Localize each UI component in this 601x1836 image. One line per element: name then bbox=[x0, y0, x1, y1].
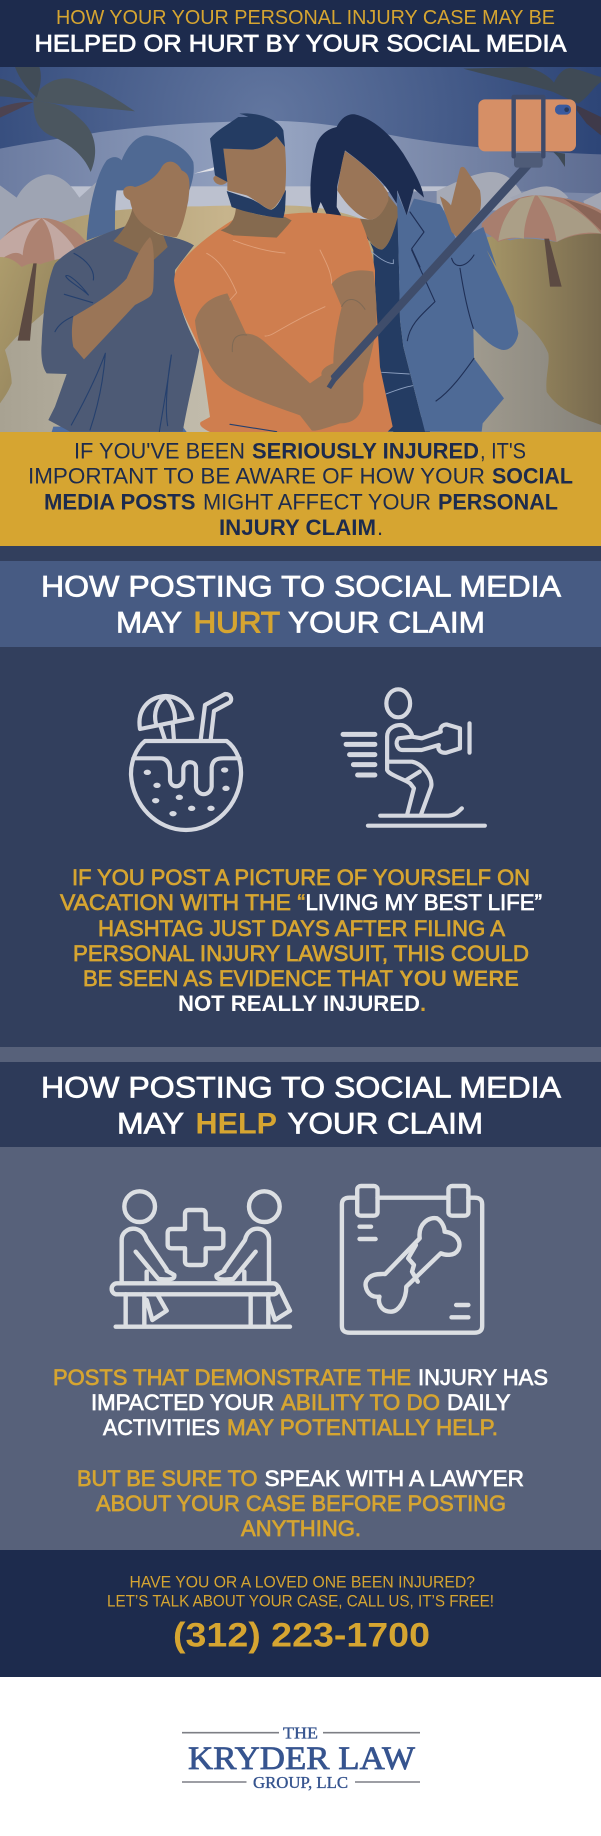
heading: may hurt your claim: MAY bbox=[116, 606, 182, 639]
intro line three bbox=[44, 489, 558, 514]
call to action text: HAVE YOU OR A LOVED ONE BEEN INJURED? bbox=[130, 1573, 475, 1592]
palm tree left bbox=[0, 67, 135, 172]
hurt section text bbox=[60, 865, 542, 1016]
intro line two: IMPORTANT TO BE AWARE OF HOW YOUR bbox=[28, 463, 485, 488]
intro line one: IF YOU'VE BEEN bbox=[74, 438, 245, 463]
sky streak bbox=[194, 167, 215, 174]
phone number: (312) 223-1700 bbox=[173, 1617, 430, 1655]
help section text: IMPACTED YOUR bbox=[91, 1390, 274, 1415]
woman right bbox=[310, 114, 518, 432]
help section text: DAILY bbox=[447, 1390, 511, 1415]
selfie stick bbox=[327, 167, 532, 389]
sand dune right bbox=[480, 233, 601, 425]
help section text: ABOUT YOUR CASE BEFORE POSTING bbox=[96, 1491, 506, 1516]
hurt section text: NOT REALLY INJURED bbox=[178, 991, 420, 1016]
heading: may hurt your claim: YOUR CLAIM bbox=[288, 606, 485, 639]
umbrella pole left bbox=[18, 263, 37, 341]
header line two: HELPED OR HURT BY YOUR SOCIAL MEDIA bbox=[34, 31, 566, 58]
heading: may hurt your claim: HURT bbox=[194, 606, 280, 639]
intro line one: , IT'S bbox=[480, 438, 526, 463]
help section text: MAY POTENTIALLY HELP. bbox=[227, 1415, 498, 1440]
icon: coconut drink with umbrella bbox=[131, 694, 241, 830]
icon: x-ray of fractured bone on clipboard bbox=[342, 1186, 482, 1333]
help section text: BUT BE SURE TO bbox=[77, 1466, 258, 1491]
hurt section text: VACATION WITH THE “ bbox=[60, 890, 305, 915]
beach umbrella left bbox=[0, 218, 87, 267]
help section text bbox=[53, 1365, 548, 1541]
icon: water skier bbox=[343, 689, 485, 826]
help section text: ANYTHING. bbox=[241, 1516, 361, 1541]
footer call to action bbox=[0, 1550, 601, 1677]
man centre bbox=[174, 113, 393, 432]
call to action text line two: LET’S TALK ABOUT YOUR CASE, CALL US, IT’S FREE! bbox=[107, 1592, 494, 1611]
intro line one: SERIOUSLY INJURED bbox=[252, 438, 479, 463]
intro line one bbox=[74, 438, 526, 463]
beach umbrella right bbox=[482, 195, 601, 287]
icon: two doctors at a table with medical cross bbox=[112, 1191, 290, 1327]
intro line four: . bbox=[377, 515, 383, 540]
logo: The Kryder Law Group bbox=[0, 1677, 601, 1836]
intro callout band bbox=[0, 432, 601, 546]
palm tree right bbox=[463, 67, 601, 167]
logo: The Kryder Law Group: KRYDER LAW bbox=[188, 1741, 416, 1777]
header band bbox=[0, 0, 601, 67]
panel: hurt section bbox=[0, 647, 601, 1047]
intro line four: INJURY CLAIM bbox=[219, 515, 376, 540]
heading: may help your claim bbox=[0, 1062, 601, 1147]
intro line three: PERSONAL bbox=[438, 489, 558, 514]
hurt section text: . bbox=[420, 991, 426, 1016]
hurt section text: LIVING MY BEST LIFE” bbox=[306, 890, 542, 915]
header line one: HOW YOUR YOUR PERSONAL INJURY CASE MAY BE bbox=[56, 7, 555, 29]
heading: may hurt your claim: HOW POSTING TO SOCIAL MEDIA bbox=[41, 571, 561, 604]
hero illustration: three friends taking a beach selfie bbox=[0, 67, 601, 432]
logo: The Kryder Law Group: THE bbox=[283, 1724, 318, 1742]
woman left bbox=[41, 135, 199, 432]
intro line three: MEDIA POSTS bbox=[44, 489, 196, 514]
help section text: POSTS THAT DEMONSTRATE THE bbox=[53, 1365, 411, 1390]
logo: The Kryder Law Group: GROUP, LLC bbox=[253, 1773, 348, 1792]
hurt section text: HASHTAG JUST DAYS AFTER FILING A bbox=[98, 916, 505, 941]
spacer band above hurt section bbox=[0, 546, 601, 561]
heading: may help your claim: HELP bbox=[196, 1107, 277, 1140]
heading: may hurt your claim bbox=[0, 561, 601, 647]
sand dune left bbox=[0, 257, 60, 403]
help section text: INJURY HAS bbox=[418, 1365, 548, 1390]
intro line three: MIGHT AFFECT YOUR bbox=[203, 489, 431, 514]
phone on selfie stick bbox=[478, 97, 576, 168]
heading: may help your claim: MAY bbox=[117, 1107, 184, 1140]
panel: help section bbox=[0, 1147, 601, 1550]
hurt section text: PERSONAL INJURY LAWSUIT, THIS COULD bbox=[73, 941, 529, 966]
heading: may help your claim: YOUR CLAIM bbox=[288, 1107, 483, 1140]
help section text: SPEAK WITH A LAWYER bbox=[264, 1466, 524, 1491]
intro line two: SOCIAL bbox=[492, 463, 573, 488]
hurt section text: YOU WERE bbox=[399, 966, 519, 991]
clouds bbox=[0, 172, 601, 274]
hurt section text: IF YOU POST A PICTURE OF YOURSELF ON bbox=[72, 865, 530, 890]
hurt section text: BE SEEN AS EVIDENCE THAT bbox=[83, 966, 393, 991]
spacer band above help section bbox=[0, 1047, 601, 1062]
help section text: ABILITY TO DO bbox=[281, 1390, 440, 1415]
help section text: ACTIVITIES bbox=[103, 1415, 220, 1440]
heading: may help your claim: HOW POSTING TO SOCIAL MEDIA bbox=[41, 1071, 561, 1104]
